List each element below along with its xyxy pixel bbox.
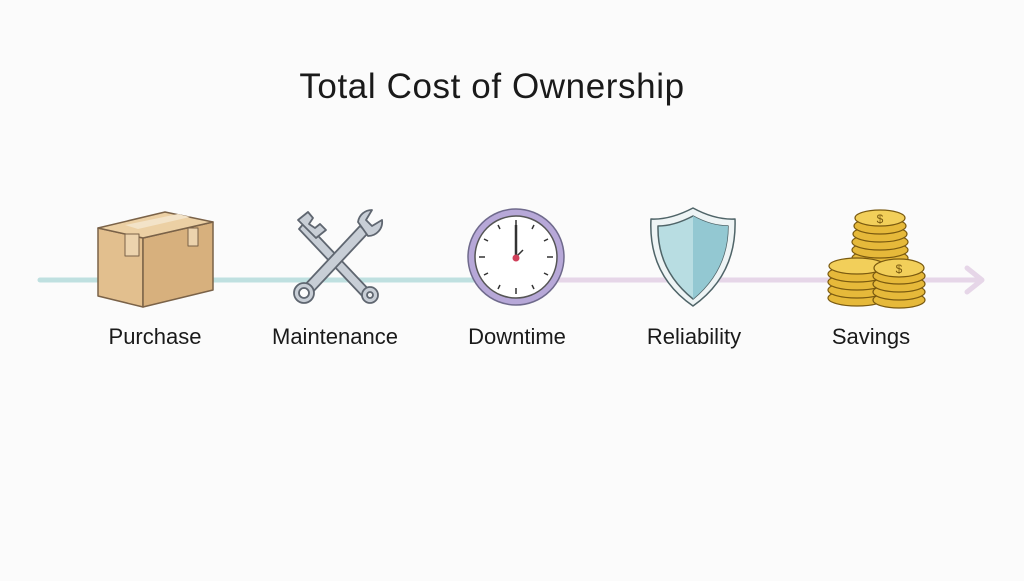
label: Downtime: Downtime xyxy=(468,324,566,349)
label: Maintenance: Maintenance xyxy=(272,324,398,349)
icon: box xyxy=(98,212,213,307)
icon: coins: $ xyxy=(896,262,903,276)
icon: coins: $ xyxy=(877,212,884,226)
icon: shield xyxy=(651,208,735,306)
label: Purchase: Purchase xyxy=(109,324,201,349)
title: Total Cost of Ownership xyxy=(299,67,685,106)
icon: clock xyxy=(468,209,564,305)
timeline arrow xyxy=(40,268,982,292)
label: Savings: Savings xyxy=(832,324,910,349)
label: Reliability: Reliability xyxy=(647,324,741,349)
icon: wrenches xyxy=(294,210,382,303)
icon: coins xyxy=(828,210,925,308)
